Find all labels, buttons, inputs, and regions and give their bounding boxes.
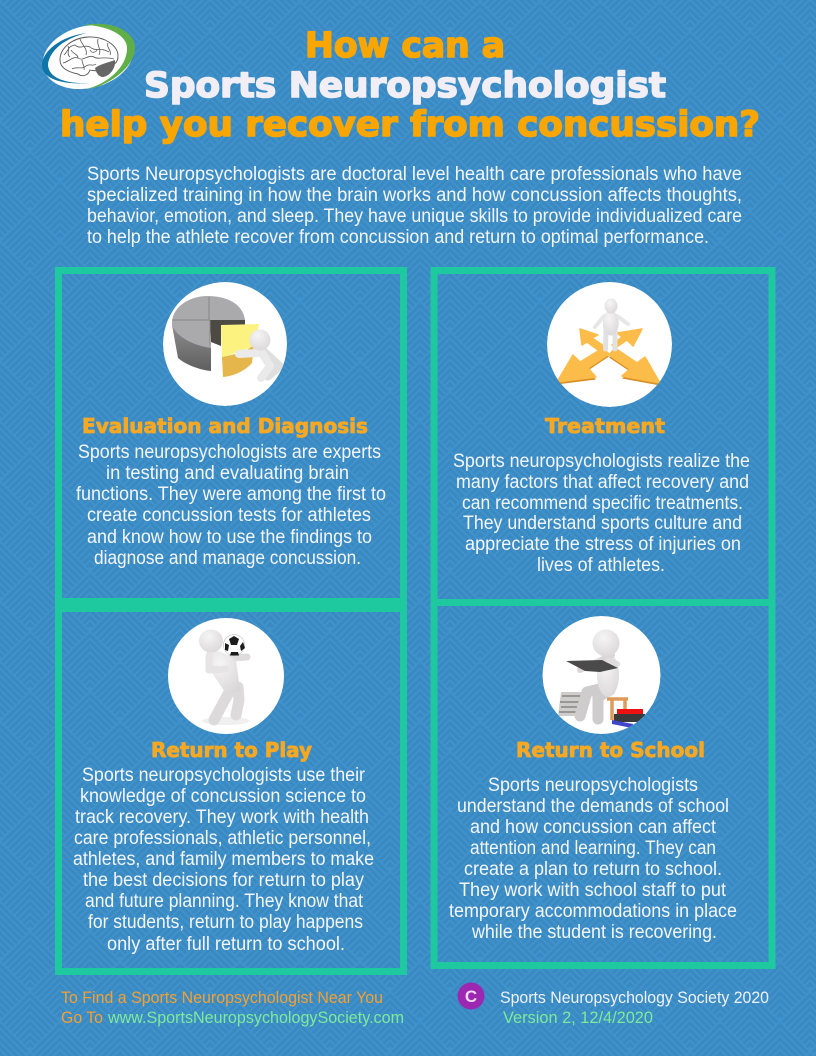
body text: in testing and evaluating brain (106, 463, 349, 484)
intro text: Sports Neuropsychologists are doctoral level health care professionals who have (87, 164, 742, 185)
body text: lives of athletes. (537, 555, 665, 576)
title: Sports Neuropsychologist (144, 66, 666, 106)
body text: many factors that affect recovery and (456, 472, 749, 493)
icon: figure pushing pie chart wedge (163, 282, 287, 406)
footer: find a neuropsychologist: Go To (61, 1008, 103, 1027)
body text (76, 442, 386, 569)
heading: Return to Play (151, 738, 312, 762)
heading: Return to School (516, 738, 705, 762)
intro text (87, 164, 742, 248)
heading: Treatment (545, 414, 665, 438)
footer: society and version (500, 988, 769, 1027)
body text: create a plan to return to school. (464, 859, 722, 880)
body text: can recommend specific treatments. (462, 493, 743, 514)
heading: Evaluation and Diagnosis (82, 414, 368, 438)
body text: track recovery. They work with health (75, 807, 369, 828)
panel: treatment (434, 270, 772, 602)
body text: and future planning. They know that (85, 891, 364, 912)
icon: brain logo (36, 16, 140, 98)
body text: Sports neuropsychologists (488, 775, 698, 796)
body text: attention and learning. They can (470, 838, 716, 859)
body text: understand the demands of school (457, 796, 729, 817)
footer: society and version: Sports Neuropsychology Society 2020 (500, 988, 769, 1007)
title: How can a (305, 26, 505, 66)
body text: for students, return to play happens (88, 912, 363, 933)
body text: appreciate the stress of injuries on (465, 534, 741, 555)
body text: and know how to use the findings to (87, 527, 372, 548)
body text: while the student is recovering. (471, 922, 717, 943)
body text: care professionals, athletic personnel, (74, 828, 371, 849)
body text (73, 765, 374, 955)
body text: Sports neuropsychologists use their (82, 765, 366, 786)
body text: create concussion tests for athletes (87, 505, 371, 526)
intro text: specialized training in how the brain works and how concussion affects thoughts, (87, 185, 742, 206)
body text: Sports neuropsychologists realize the (453, 451, 750, 472)
body text: knowledge of concussion science to (80, 786, 366, 807)
body text (453, 451, 750, 576)
icon: copyright badge (458, 982, 484, 1010)
body text: and how concussion can affect (470, 817, 717, 838)
title: help you recover from concussion? (60, 105, 760, 145)
body text: the best decisions for return to play (83, 870, 364, 891)
icon: figure on crossroads arrows (547, 282, 672, 407)
footer: find a neuropsychologist: www.SportsNeuropsychologySociety.com (107, 1008, 404, 1027)
footer: find a neuropsychologist: To Find a Sports Neuropsychologist Near You (61, 988, 383, 1007)
panel: evaluation and diagnosis (58, 270, 404, 602)
icon: figure balancing soccer ball (168, 618, 284, 734)
footer: find a neuropsychologist (61, 988, 404, 1027)
body text: They understand sports culture and (463, 513, 742, 534)
footer: society and version: Version 2, 12/4/2020 (503, 1008, 653, 1027)
title (60, 26, 760, 145)
body text: functions. They were among the first to (76, 484, 386, 505)
icon: figure reading on stool with books (542, 616, 660, 734)
panel: return to school (434, 602, 772, 966)
intro text: to help the athlete recover from concussion and return to optimal performance. (87, 227, 709, 248)
body text: temporary accommodations in place (449, 901, 737, 922)
body text: They work with school staff to put (459, 880, 727, 901)
body text: only after full return to school. (107, 934, 345, 955)
body text: athletes, and family members to make (73, 849, 374, 870)
body text (449, 775, 737, 943)
panel: return to play (58, 608, 404, 972)
body text: diagnose and manage concussion. (94, 548, 361, 569)
intro text: behavior, emotion, and sleep. They have unique skills to provide individualized care (87, 206, 742, 227)
icon: copyright badge: C (465, 987, 477, 1006)
body text: Sports neuropsychologists are experts (78, 442, 381, 463)
